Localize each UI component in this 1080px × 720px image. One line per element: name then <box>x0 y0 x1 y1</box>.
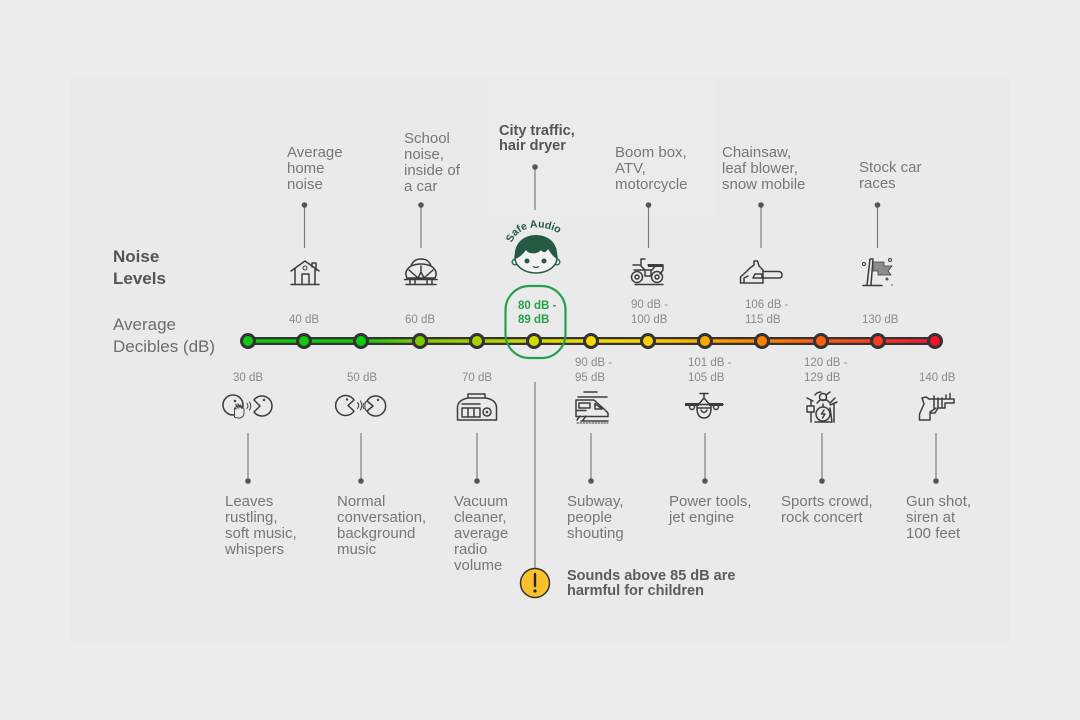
item: subway: Subway, <box>567 493 623 510</box>
icon: revolver <box>920 394 954 420</box>
icon: drum kit <box>807 392 837 422</box>
item: sports crowd, rock concert <box>781 357 873 526</box>
item: leaves rustling <box>223 372 297 558</box>
item: leaves rustling: 30 dB <box>233 372 263 384</box>
item: school noise: School <box>404 130 450 147</box>
item: school noise <box>404 130 461 326</box>
item: vacuum cleaner: 70 dB <box>462 372 492 384</box>
item: vacuum cleaner: average <box>454 525 508 542</box>
icon: house <box>291 261 319 284</box>
heading: noise levels: Noise <box>113 247 159 266</box>
item: gun shot: 140 dB <box>919 372 956 384</box>
item: stock car races: races <box>859 175 896 192</box>
highlight: 80 to 89 dB <box>506 286 566 358</box>
item: city traffic, hair dryer: hair dryer <box>499 138 566 154</box>
item: subway: people <box>567 509 612 526</box>
item: chainsaw: snow mobile <box>722 176 805 193</box>
item: power tools, jet engine: 101 dB - <box>688 357 732 369</box>
item: average home noise: 40 dB <box>289 314 319 326</box>
highlight: 80 to 89 dB: 80 dB - <box>518 300 557 312</box>
item: sports crowd, rock concert: Sports crowd, <box>781 493 873 510</box>
item: normal conversation <box>336 372 426 558</box>
item: boom box, ATV, motorcycle <box>615 144 688 326</box>
item: average home noise <box>287 144 343 326</box>
item: power tools, jet engine <box>668 357 752 526</box>
item: boom box, ATV, motorcycle: Boom box, <box>615 144 687 161</box>
item: stock car races: Stock car <box>859 159 922 176</box>
icon: train <box>576 392 608 423</box>
item: power tools, jet engine: jet engine <box>668 509 734 526</box>
item: chainsaw: leaf blower, <box>722 160 798 177</box>
item: gun shot: siren at <box>906 509 956 526</box>
item: chainsaw: Chainsaw, <box>722 144 791 161</box>
item: school noise: inside of <box>404 162 461 179</box>
item: vacuum cleaner: cleaner, <box>454 509 507 526</box>
callout: harmful sound warning: Sounds above 85 dB are <box>567 568 735 584</box>
item: power tools, jet engine: Power tools, <box>669 493 752 510</box>
item: subway: 90 dB - <box>575 357 612 369</box>
icon: chainsaw <box>740 261 782 283</box>
item: power tools, jet engine: 105 dB <box>688 372 725 384</box>
icon: jet <box>685 394 723 418</box>
item: leaves rustling: soft music, <box>225 525 297 542</box>
item: chainsaw: 115 dB <box>745 314 781 326</box>
item: school noise: 60 dB <box>405 314 435 326</box>
item: normal conversation: Normal <box>337 493 385 510</box>
heading: noise levels: Levels <box>113 269 166 288</box>
item: city traffic, hair dryer <box>499 123 575 210</box>
item: sports crowd, rock concert: rock concert <box>781 509 864 526</box>
item: sports crowd, rock concert: 129 dB <box>804 372 841 384</box>
logo: Safe Audio: Safe Audio <box>506 220 560 242</box>
item: normal conversation: music <box>337 541 377 558</box>
item: vacuum cleaner: Vacuum <box>454 493 508 510</box>
item: school noise: noise, <box>404 146 444 163</box>
icon: two speaking faces <box>336 396 386 416</box>
heading: average decibels: Average <box>113 315 176 334</box>
callout: harmful sound warning <box>520 382 735 599</box>
item: boom box, ATV, motorcycle: 90 dB - <box>631 299 668 311</box>
item: boom box, ATV, motorcycle: 100 dB <box>631 314 668 326</box>
icon: car <box>404 259 437 284</box>
item: subway <box>567 357 624 542</box>
icon: warning <box>520 568 550 598</box>
item: stock car races: 130 dB <box>862 314 899 326</box>
item: normal conversation: conversation, <box>337 509 426 526</box>
item: chainsaw: 106 dB - <box>745 299 789 311</box>
item: average home noise: noise <box>287 176 323 193</box>
item: subway: shouting <box>567 525 624 542</box>
item: vacuum cleaner <box>454 372 508 574</box>
item: average home noise: home <box>287 160 325 177</box>
icon: whisper <box>223 395 272 418</box>
item: sports crowd, rock concert: 120 dB - <box>804 357 848 369</box>
item: vacuum cleaner: volume <box>454 557 502 574</box>
logo: Safe Audio <box>506 220 560 274</box>
item: city traffic, hair dryer: City traffic, <box>499 123 575 139</box>
item: leaves rustling: whispers <box>224 541 284 558</box>
item: school noise: a car <box>404 178 437 195</box>
item: gun shot <box>906 372 971 542</box>
item: gun shot: 100 feet <box>906 525 961 542</box>
item: leaves rustling: rustling, <box>225 509 278 526</box>
heading: average decibels: Decibles (dB) <box>113 337 215 356</box>
item: stock car races <box>859 159 922 326</box>
item: leaves rustling: Leaves <box>225 493 273 510</box>
item: boom box, ATV, motorcycle: ATV, <box>615 160 646 177</box>
item: vacuum cleaner: radio <box>454 541 487 558</box>
decibel timeline <box>242 334 942 348</box>
icon: radio <box>458 394 496 420</box>
item: subway: 95 dB <box>575 372 605 384</box>
item: gun shot: Gun shot, <box>906 493 971 510</box>
icon: ATV <box>632 259 663 284</box>
item: chainsaw <box>722 144 805 326</box>
item: average home noise: Average <box>287 144 343 161</box>
highlight: 80 to 89 dB: 89 dB <box>518 314 549 326</box>
icon: checkered flag <box>862 258 893 286</box>
item: normal conversation: 50 dB <box>347 372 377 384</box>
callout: harmful sound warning: harmful for children <box>567 583 704 599</box>
item: boom box, ATV, motorcycle: motorcycle <box>615 176 688 193</box>
item: normal conversation: background <box>337 525 415 542</box>
